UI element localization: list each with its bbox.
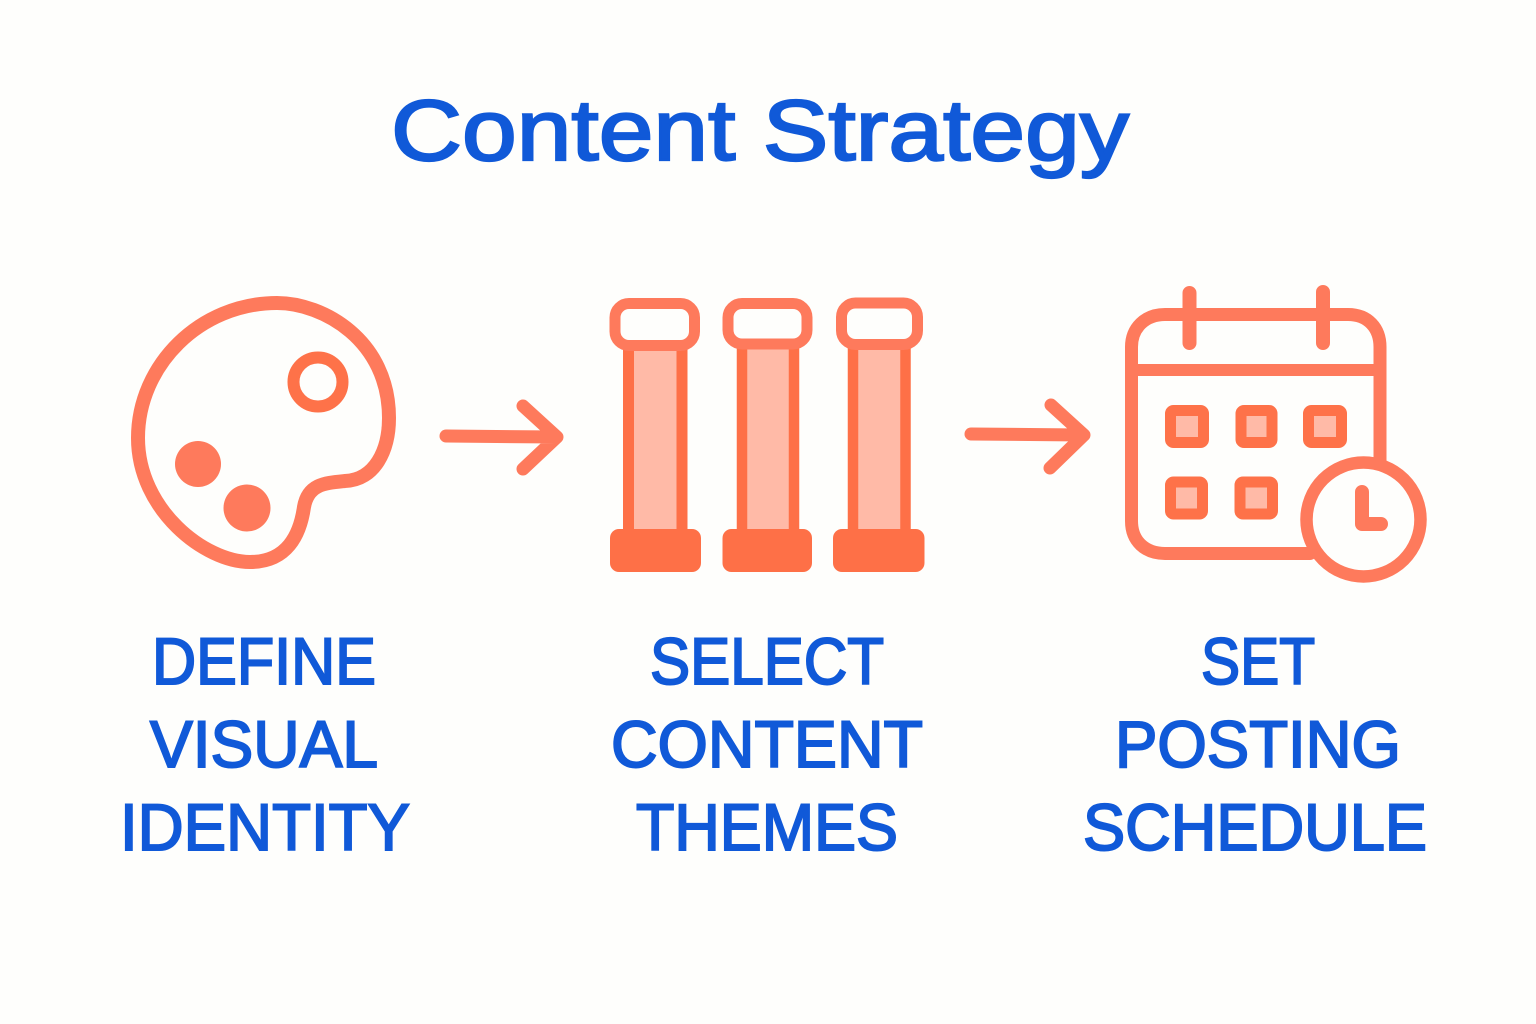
label: define visual identity: [120, 624, 410, 864]
label: define visual identity: IDENTITY: [120, 790, 410, 864]
label: select content themes: THEMES: [636, 790, 898, 864]
label: select content themes: SELECT: [650, 624, 884, 698]
clock hands: [1362, 492, 1381, 524]
calendar rings: [1190, 292, 1323, 343]
label: define visual identity: VISUAL: [150, 707, 378, 781]
label: set posting schedule: SET: [1201, 624, 1315, 698]
label: select content themes: [611, 624, 923, 864]
calendar body: [1132, 314, 1380, 554]
label: set posting schedule: POSTING: [1115, 707, 1401, 781]
label: set posting schedule: SCHEDULE: [1083, 790, 1427, 864]
pillar 2: [722, 304, 812, 572]
label: select content themes: CONTENT: [611, 707, 923, 781]
pillar 3: [833, 303, 924, 572]
calendar header line: [1132, 364, 1380, 376]
clock: [1306, 462, 1420, 576]
icon: calendar with clock: [1132, 292, 1420, 576]
label: set posting schedule: [1083, 624, 1427, 864]
date cells: [1170, 410, 1342, 514]
icon: palette: [138, 303, 389, 562]
title: Content Strategy: [391, 83, 1129, 179]
arrow 1: [446, 406, 557, 469]
arrow 2: [971, 405, 1084, 468]
icon: pillars: [610, 303, 924, 572]
label: define visual identity: DEFINE: [152, 624, 376, 698]
pillar 1: [610, 304, 701, 572]
